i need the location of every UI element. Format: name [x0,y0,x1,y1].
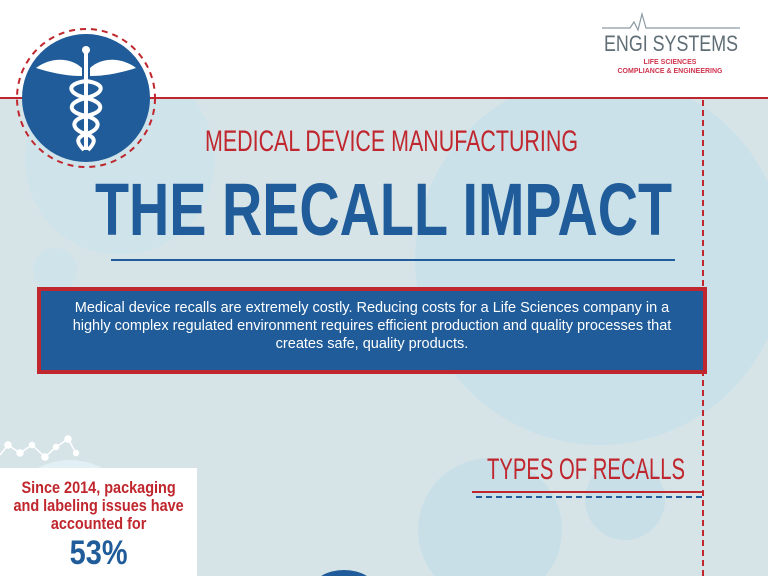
red vertical dashed line [702,100,704,576]
callout: packaging stat: and labeling issues have [13,496,184,515]
intro text box: Medical device recalls are extremely costly. Reducing costs for a Life Sciences company in a [75,300,669,316]
intro text box: highly complex regulated environment requires efficient production and quality processes that [73,318,671,334]
intro text box [37,287,707,374]
callout: packaging stat: 53% [70,534,128,572]
icon: caduceus emblem [16,28,156,168]
title underline [111,259,675,261]
logo: ENGI SYSTEMS: COMPLIANCE & ENGINEERING [617,68,722,75]
header red line [0,97,768,99]
callout: packaging stat [0,468,197,576]
intro text box: creates safe, quality products. [276,336,468,352]
molecule decoration icon [0,435,80,461]
callout: packaging stat: Since 2014, packaging [21,478,176,497]
white header [0,0,768,98]
callout: packaging stat: accounted for [51,514,146,533]
logo: ENGI SYSTEMS [602,12,740,75]
logo: ENGI SYSTEMS: LIFE SCIENCES [644,59,696,66]
